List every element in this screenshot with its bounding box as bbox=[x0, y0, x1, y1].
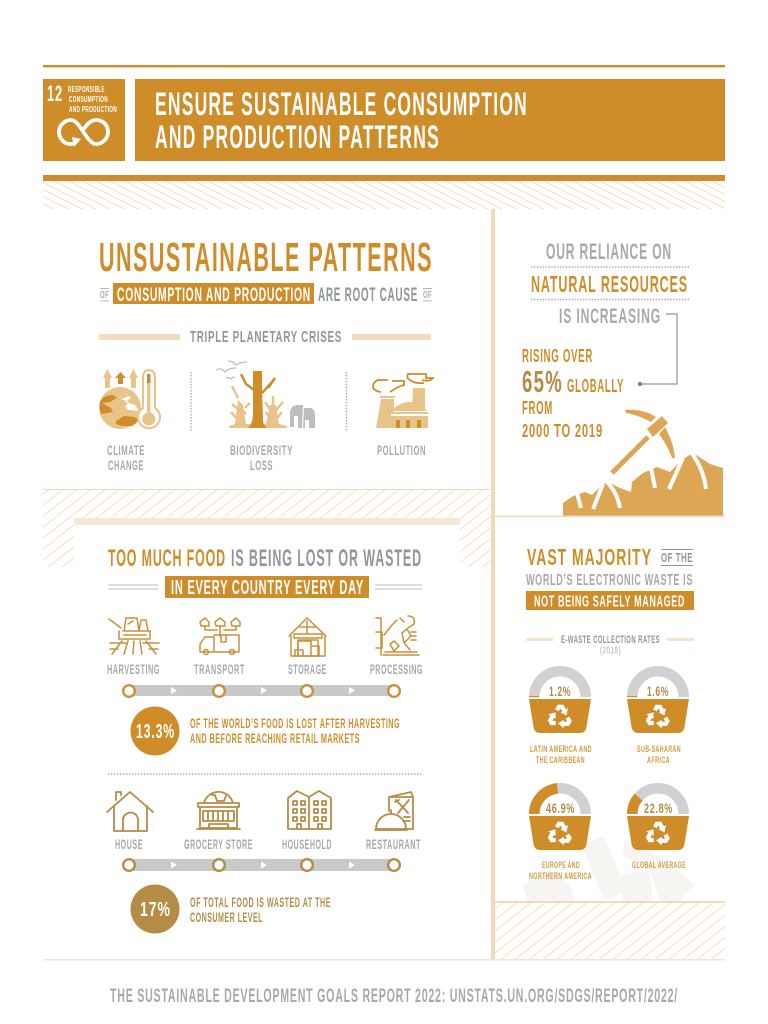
label: house: HOUSE bbox=[115, 837, 143, 852]
subheading: e-waste collection rates bbox=[526, 634, 694, 656]
stat: 65% globally: 65% bbox=[522, 364, 563, 399]
gauge: Latin America 1.2%: 1.2% bbox=[549, 684, 571, 699]
label: storage: STORAGE bbox=[288, 662, 327, 677]
subheading: e-waste collection rates: (2019) bbox=[600, 646, 621, 656]
icon: pickaxe and mountain bbox=[563, 410, 723, 516]
subheading: triple planetary crises: TRIPLE PLANETARY CRISES bbox=[190, 329, 342, 346]
heading: vast majority: VAST MAJORITY bbox=[527, 544, 652, 570]
gauge: Sub-Saharan Africa 1.6% bbox=[627, 671, 689, 766]
icon: harvesting bbox=[109, 618, 159, 654]
SDG 12 badge: RESPONSIBLE bbox=[68, 84, 105, 94]
icon: restaurant bbox=[375, 792, 413, 830]
label: grocery store: GROCERY STORE bbox=[184, 837, 253, 852]
icon: climate change bbox=[99, 369, 160, 429]
label: biodiversity loss: BIODIVERSITY bbox=[230, 442, 293, 458]
icon: pollution bbox=[373, 374, 433, 428]
gauge: Europe and Northern America 46.9%: 46.9% bbox=[546, 801, 575, 816]
heading: vast majority: OF THE bbox=[661, 550, 693, 565]
label: biodiversity loss bbox=[230, 442, 293, 473]
label: household: HOUSEHOLD bbox=[282, 837, 332, 852]
stat: 17%: OF TOTAL FOOD IS WASTED AT THE bbox=[190, 895, 331, 910]
top rule bbox=[43, 65, 725, 67]
heading: too much food: TOO MUCH FOOD bbox=[108, 545, 226, 572]
timeline: food waste stages bbox=[123, 859, 400, 871]
gauge: Sub-Saharan Africa 1.6%: AFRICA bbox=[647, 755, 670, 766]
timeline: food loss stages bbox=[123, 685, 400, 697]
header banner bbox=[135, 79, 725, 161]
heading: unsustainable patterns: ARE ROOT CAUSE bbox=[318, 285, 418, 306]
heading: natural resources: IS INCREASING bbox=[559, 304, 661, 328]
label: climate change: CLIMATE bbox=[107, 442, 145, 458]
gauge: global average 22.8%: GLOBAL AVERAGE bbox=[632, 860, 686, 871]
icon: storage bbox=[289, 618, 326, 656]
stat: 13.3%: AND BEFORE REACHING RETAIL MARKETS bbox=[190, 731, 360, 746]
arrow: connector bbox=[638, 314, 677, 386]
label: pollution: POLLUTION bbox=[377, 442, 426, 458]
label: biodiversity loss: LOSS bbox=[250, 457, 273, 473]
heading: too much food: IN EVERY COUNTRY EVERY DAY bbox=[171, 577, 364, 599]
label: processing: PROCESSING bbox=[370, 662, 423, 677]
gauge: global average 22.8%: 22.8% bbox=[644, 801, 673, 816]
divider dots bbox=[191, 372, 346, 431]
heading: unsustainable patterns: UNSUSTAINABLE PATTERNS bbox=[99, 234, 433, 280]
heading: vast majority bbox=[526, 544, 694, 610]
gauge: Latin America 1.2% bbox=[529, 671, 592, 766]
gauge: Europe and Northern America 46.9% bbox=[529, 788, 592, 882]
SDG 12 badge: AND PRODUCTION bbox=[69, 104, 117, 114]
gauge: Europe and Northern America 46.9%: EUROPE AND bbox=[542, 860, 580, 871]
panel: e-waste bbox=[526, 544, 694, 882]
icon: processing bbox=[376, 616, 419, 655]
icon: house bbox=[107, 792, 153, 831]
icon: biodiversity loss bbox=[216, 361, 315, 428]
gauge: Latin America 1.2%: THE CARIBBEAN bbox=[536, 755, 585, 766]
heading: unsustainable patterns: OF bbox=[100, 290, 109, 301]
subheading: e-waste collection rates: E-WASTE COLLECTION RATES bbox=[561, 634, 660, 646]
label: climate change: CHANGE bbox=[108, 457, 144, 473]
panel: food loss and waste bbox=[107, 545, 423, 934]
gauge: Sub-Saharan Africa 1.6%: SUB-SAHARAN bbox=[637, 744, 681, 755]
icon: grocery store bbox=[197, 792, 240, 829]
icon: household bbox=[288, 791, 331, 829]
SDG 12 badge: CONSUMPTION bbox=[69, 94, 108, 104]
gauge: Europe and Northern America 46.9%: NORTHERN AMERICA bbox=[529, 871, 592, 882]
gauge: Sub-Saharan Africa 1.6%: 1.6% bbox=[647, 684, 669, 699]
stat: 65% globally: GLOBALLY bbox=[567, 375, 624, 396]
heading: unsustainable patterns bbox=[99, 234, 433, 306]
header banner: AND PRODUCTION PATTERNS bbox=[155, 119, 440, 155]
heading: unsustainable patterns: CONSUMPTION AND PRODUCTION bbox=[117, 285, 311, 306]
heading: too much food: IS BEING LOST OR WASTED bbox=[231, 545, 422, 572]
stat: 17% bbox=[130, 884, 331, 934]
heading: unsustainable patterns: OF bbox=[423, 290, 432, 301]
stat: 13.3% bbox=[130, 706, 400, 756]
stat: 13.3%: 13.3% bbox=[136, 721, 175, 743]
icon: transport bbox=[200, 618, 240, 654]
stat: 17%: 17% bbox=[140, 899, 171, 921]
gauge: Latin America 1.2%: LATIN AMERICA AND bbox=[530, 744, 592, 755]
label: climate change bbox=[107, 442, 145, 473]
panel: natural resources bbox=[522, 239, 723, 516]
SDG 12 badge: 12 bbox=[47, 81, 63, 106]
stat: 13.3%: OF THE WORLD’S FOOD IS LOST AFTER HARVESTING bbox=[190, 716, 400, 731]
stat: 65% globally bbox=[522, 345, 624, 441]
heading: natural resources bbox=[531, 239, 689, 328]
label: transport: TRANSPORT bbox=[194, 662, 245, 677]
SDG 12 badge bbox=[43, 79, 125, 161]
label: harvesting: HARVESTING bbox=[107, 662, 160, 677]
stat: 65% globally: RISING OVER bbox=[522, 345, 593, 366]
stat: 65% globally: FROM bbox=[522, 397, 553, 418]
stat: 65% globally: 2000 TO 2019 bbox=[522, 420, 603, 441]
label: restaurant: RESTAURANT bbox=[366, 837, 421, 852]
gauge: global average 22.8% bbox=[627, 788, 689, 871]
heading: too much food bbox=[108, 545, 422, 599]
background icon: e-waste bbox=[522, 836, 695, 923]
stat: 17%: CONSUMER LEVEL bbox=[190, 910, 263, 925]
